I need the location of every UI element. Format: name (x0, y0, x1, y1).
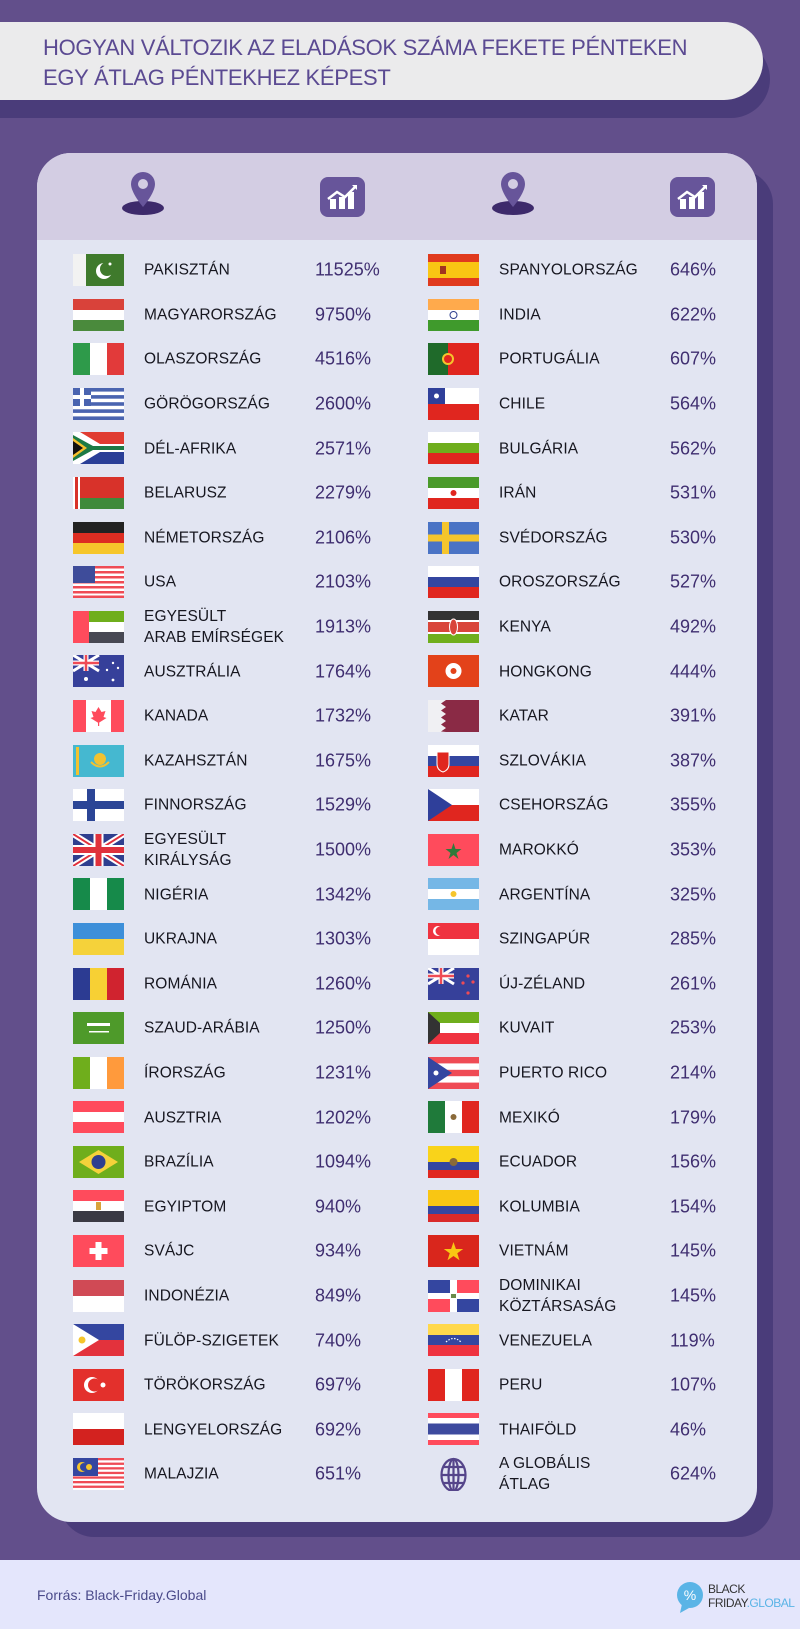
right column list: 325% (670, 884, 716, 904)
source text: Forrás: Black-Friday.Global (37, 1587, 206, 1603)
right column list: HONGKONG (499, 663, 592, 680)
left column list: USA (144, 574, 176, 591)
header band (37, 153, 757, 240)
right column list: 562% (670, 438, 716, 458)
left column list: NÉMETORSZÁG (144, 529, 265, 546)
right column list: KATAR (499, 708, 549, 725)
left column list: 2279% (315, 483, 371, 503)
right column list: 179% (670, 1107, 716, 1127)
left column list: 940% (315, 1196, 361, 1216)
right column list: OROSZORSZÁG (499, 574, 621, 591)
right column list: CHILE (499, 396, 545, 413)
left column list: 1500% (315, 840, 371, 860)
right column list: CSEHORSZÁG (499, 797, 609, 814)
footer (0, 1560, 800, 1629)
left column list: KIRÁLYSÁG (144, 852, 232, 869)
right column list: ÁTLAG (499, 1476, 550, 1493)
left column list: 2600% (315, 394, 371, 414)
left column list: UKRAJNA (144, 931, 217, 948)
left column list: DÉL-AFRIKA (144, 440, 236, 457)
right column list: ARGENTÍNA (499, 886, 590, 903)
right column list: 145% (670, 1241, 716, 1261)
right column list: KÖZTÁRSASÁG (499, 1298, 616, 1315)
left column list: 2571% (315, 438, 371, 458)
right column list: 154% (670, 1196, 716, 1216)
right column list: SVÉDORSZÁG (499, 529, 608, 546)
right column list: 646% (670, 260, 716, 280)
left column list: GÖRÖGORSZÁG (144, 396, 270, 413)
card shadow (60, 170, 773, 1537)
right column list: DOMINIKAI (499, 1277, 581, 1294)
left column list: EGYESÜLT (144, 608, 226, 625)
left column list: 2103% (315, 572, 371, 592)
right column list: 145% (670, 1285, 716, 1305)
right column list: 214% (670, 1062, 716, 1082)
left column list: KANADA (144, 708, 208, 725)
right column list: 622% (670, 304, 716, 324)
left column list: 1250% (315, 1018, 371, 1038)
left column list: EGYIPTOM (144, 1198, 226, 1215)
right column list: MAROKKÓ (499, 842, 579, 859)
right column list: ÚJ-ZÉLAND (499, 975, 585, 992)
main card (37, 153, 757, 1522)
right column list: ECUADOR (499, 1154, 577, 1171)
right column list: KUVAIT (499, 1020, 554, 1037)
right column list: KOLUMBIA (499, 1198, 580, 1215)
right column list: KENYA (499, 619, 551, 636)
left column list: FINNORSZÁG (144, 797, 247, 814)
right column list: 527% (670, 572, 716, 592)
right column list: 46% (670, 1419, 706, 1439)
title text (43, 35, 687, 90)
right column list: 492% (670, 617, 716, 637)
left column list: 692% (315, 1419, 361, 1439)
right column list: 353% (670, 840, 716, 860)
right column list: PORTUGÁLIA (499, 351, 600, 368)
left column list: INDONÉZIA (144, 1287, 229, 1304)
right column list: 285% (670, 929, 716, 949)
left column list: EGYESÜLT (144, 831, 226, 848)
right column list: VIETNÁM (499, 1243, 569, 1260)
title text: EGY ÁTLAG PÉNTEKHEZ KÉPEST (43, 65, 391, 90)
right column list: 391% (670, 706, 716, 726)
left column list: 1260% (315, 973, 371, 993)
left column list: 4516% (315, 349, 371, 369)
logo (677, 1582, 794, 1613)
right column list: 119% (670, 1330, 715, 1350)
right column list: BULGÁRIA (499, 440, 578, 457)
left column list: BRAZÍLIA (144, 1154, 214, 1171)
title banner (0, 22, 770, 118)
right column list: 531% (670, 483, 716, 503)
left column list: OLASZORSZÁG (144, 351, 261, 368)
right column list: SZINGAPÚR (499, 931, 590, 948)
left column list: 1913% (315, 617, 371, 637)
left column list (73, 254, 380, 1490)
left column list: 1732% (315, 706, 371, 726)
left column list: PAKISZTÁN (144, 262, 230, 279)
right column list: PERU (499, 1377, 542, 1394)
left column list: MAGYARORSZÁG (144, 306, 277, 323)
left column list: ÍRORSZÁG (144, 1064, 226, 1081)
left column list: 9750% (315, 304, 371, 324)
title text: HOGYAN VÁLTOZIK AZ ELADÁSOK SZÁMA FEKETE PÉNTEKEN (43, 35, 687, 60)
logo: FRIDAY.GLOBAL (708, 1596, 794, 1610)
left column list: 1675% (315, 750, 371, 770)
left column list: AUSZTRIA (144, 1109, 221, 1126)
left column list: 1202% (315, 1107, 371, 1127)
right column list: A GLOBÁLIS (499, 1455, 590, 1472)
icon: location pin left (122, 172, 164, 215)
right column list: 387% (670, 750, 716, 770)
right column list: SZLOVÁKIA (499, 752, 586, 769)
right column list: 530% (670, 527, 716, 547)
logo: BLACK (708, 1582, 745, 1596)
right column list: PUERTO RICO (499, 1064, 607, 1081)
icon: chart left (320, 177, 365, 217)
left column list: 1303% (315, 929, 371, 949)
left column list: FÜLÖP-SZIGETEK (144, 1332, 279, 1349)
right column list: 261% (670, 973, 716, 993)
left column list: 651% (315, 1464, 361, 1484)
right column list: 607% (670, 349, 716, 369)
left column list: TÖRÖKORSZÁG (144, 1377, 266, 1394)
left column list: MALAJZIA (144, 1466, 219, 1483)
right column list: MEXIKÓ (499, 1109, 560, 1126)
right column list: SPANYOLORSZÁG (499, 262, 638, 279)
logo: % (684, 1587, 696, 1603)
left column list: 2106% (315, 527, 371, 547)
right column list: THAIFÖLD (499, 1421, 576, 1438)
icon: chart right (670, 177, 715, 217)
left column list: NIGÉRIA (144, 886, 208, 903)
left column list: ARAB EMÍRSÉGEK (144, 629, 284, 646)
left column list: KAZAHSZTÁN (144, 752, 247, 769)
left column list: SZAUD-ARÁBIA (144, 1020, 260, 1037)
right column list: INDIA (499, 306, 541, 323)
left column list: 849% (315, 1285, 361, 1305)
right column list: 107% (670, 1375, 716, 1395)
right column list: 444% (670, 661, 716, 681)
left column list: 11525% (315, 260, 380, 280)
left column list: 1529% (315, 795, 371, 815)
right column list: VENEZUELA (499, 1332, 592, 1349)
left column list: 1231% (315, 1062, 371, 1082)
right column list (428, 254, 716, 1493)
right column list: 253% (670, 1018, 716, 1038)
left column list: ROMÁNIA (144, 975, 217, 992)
left column list: 740% (315, 1330, 361, 1350)
right column list: 624% (670, 1464, 716, 1484)
left column list: 1094% (315, 1152, 371, 1172)
left column list: AUSZTRÁLIA (144, 663, 241, 680)
left column list: 1764% (315, 661, 371, 681)
left column list: BELARUSZ (144, 485, 227, 502)
left column list: 934% (315, 1241, 361, 1261)
left column list: 697% (315, 1375, 361, 1395)
left column list: SVÁJC (144, 1243, 194, 1260)
right column list: IRÁN (499, 485, 536, 502)
icon: location pin right (492, 172, 534, 215)
right column list: 156% (670, 1152, 716, 1172)
right column list: 564% (670, 394, 716, 414)
left column list: 1342% (315, 884, 371, 904)
left column list: LENGYELORSZÁG (144, 1421, 282, 1438)
right column list: 355% (670, 795, 716, 815)
